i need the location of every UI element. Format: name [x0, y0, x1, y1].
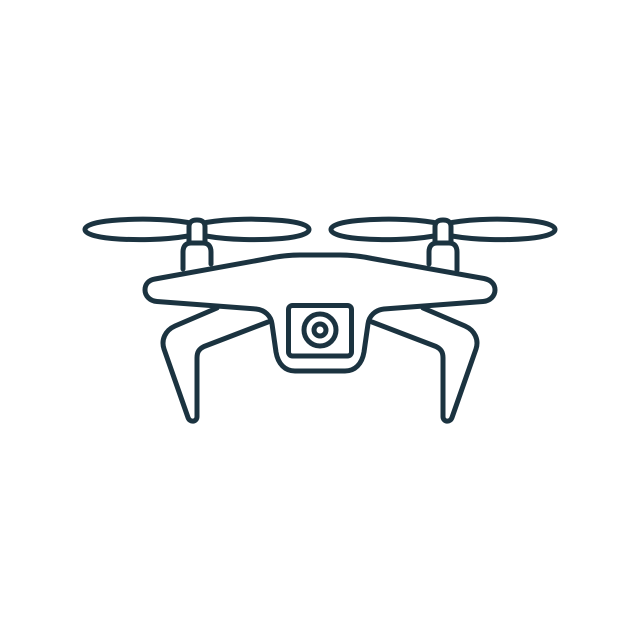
drone body: [145, 255, 495, 371]
left propeller hub: [189, 220, 205, 241]
right propeller hub: [435, 220, 451, 241]
right propeller blades: [331, 219, 555, 240]
right landing leg: [372, 308, 477, 421]
right motor: [429, 243, 457, 270]
left propeller blades: [85, 219, 309, 240]
left motor: [183, 243, 211, 269]
camera lens inner ring: [314, 324, 326, 336]
camera lens outer ring: [304, 314, 336, 346]
left propeller: [85, 219, 309, 269]
left landing leg: [163, 308, 268, 421]
right propeller: [331, 219, 555, 270]
camera housing: [288, 306, 352, 356]
